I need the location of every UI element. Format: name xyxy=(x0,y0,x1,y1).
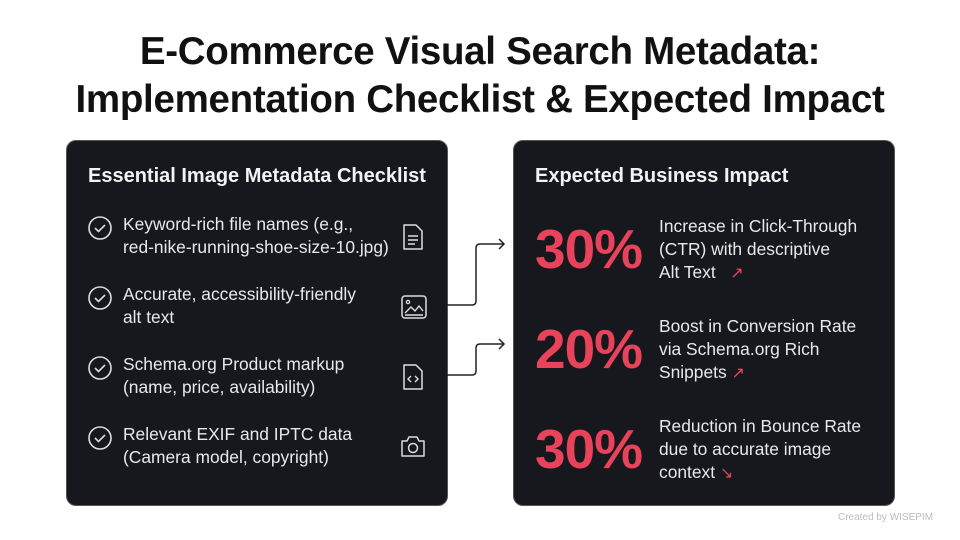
item 1: Keyword-rich file names (e.g., xyxy=(123,214,353,234)
title xyxy=(76,30,884,121)
stat 3: Reduction in Bounce Rate xyxy=(659,416,861,436)
stat 3 xyxy=(535,416,861,482)
item 4: Relevant EXIF and IPTC data xyxy=(123,424,352,444)
item 2: Accurate, accessibility-friendly xyxy=(123,284,356,304)
item 2 xyxy=(88,284,427,327)
impact heading: Expected Business Impact xyxy=(535,165,788,187)
stat 2: Snippets ↗ xyxy=(659,362,745,382)
stat 3: 30% xyxy=(535,418,642,480)
stat 1: 30% xyxy=(535,218,642,280)
item 3: (name, price, availability) xyxy=(123,377,315,397)
panel: impact xyxy=(513,140,895,506)
stat 1: Increase in Click-Through xyxy=(659,216,857,236)
item 3: Schema.org Product markup xyxy=(123,354,344,374)
stat 3: due to accurate image xyxy=(659,439,831,459)
checklist heading: Essential Image Metadata Checklist xyxy=(88,165,426,187)
stat 2: via Schema.org Rich xyxy=(659,339,819,359)
item 3 xyxy=(88,354,423,397)
item 1: red-nike-running-shoe-size-10.jpg) xyxy=(123,237,389,257)
item 2: alt text xyxy=(123,307,174,327)
item 4: (Camera model, copyright) xyxy=(123,447,329,467)
stat 2: 20% xyxy=(535,318,642,380)
stat 3: context ↘ xyxy=(659,462,733,482)
stat 2 xyxy=(535,316,856,382)
title: E-Commerce Visual Search Metadata: xyxy=(140,30,820,73)
panel: checklist xyxy=(66,140,448,506)
stat 1: (CTR) with descriptive xyxy=(659,239,830,259)
item 1 xyxy=(88,214,423,257)
stat 1: Alt Text ↗ xyxy=(659,262,744,282)
arrows: checklist to impact xyxy=(447,238,505,376)
item 4 xyxy=(88,424,425,467)
stat 2: Boost in Conversion Rate xyxy=(659,316,856,336)
watermark: Created by WISEPIM xyxy=(838,512,933,523)
title: Implementation Checklist & Expected Impact xyxy=(76,78,884,121)
stat 1 xyxy=(535,216,857,282)
